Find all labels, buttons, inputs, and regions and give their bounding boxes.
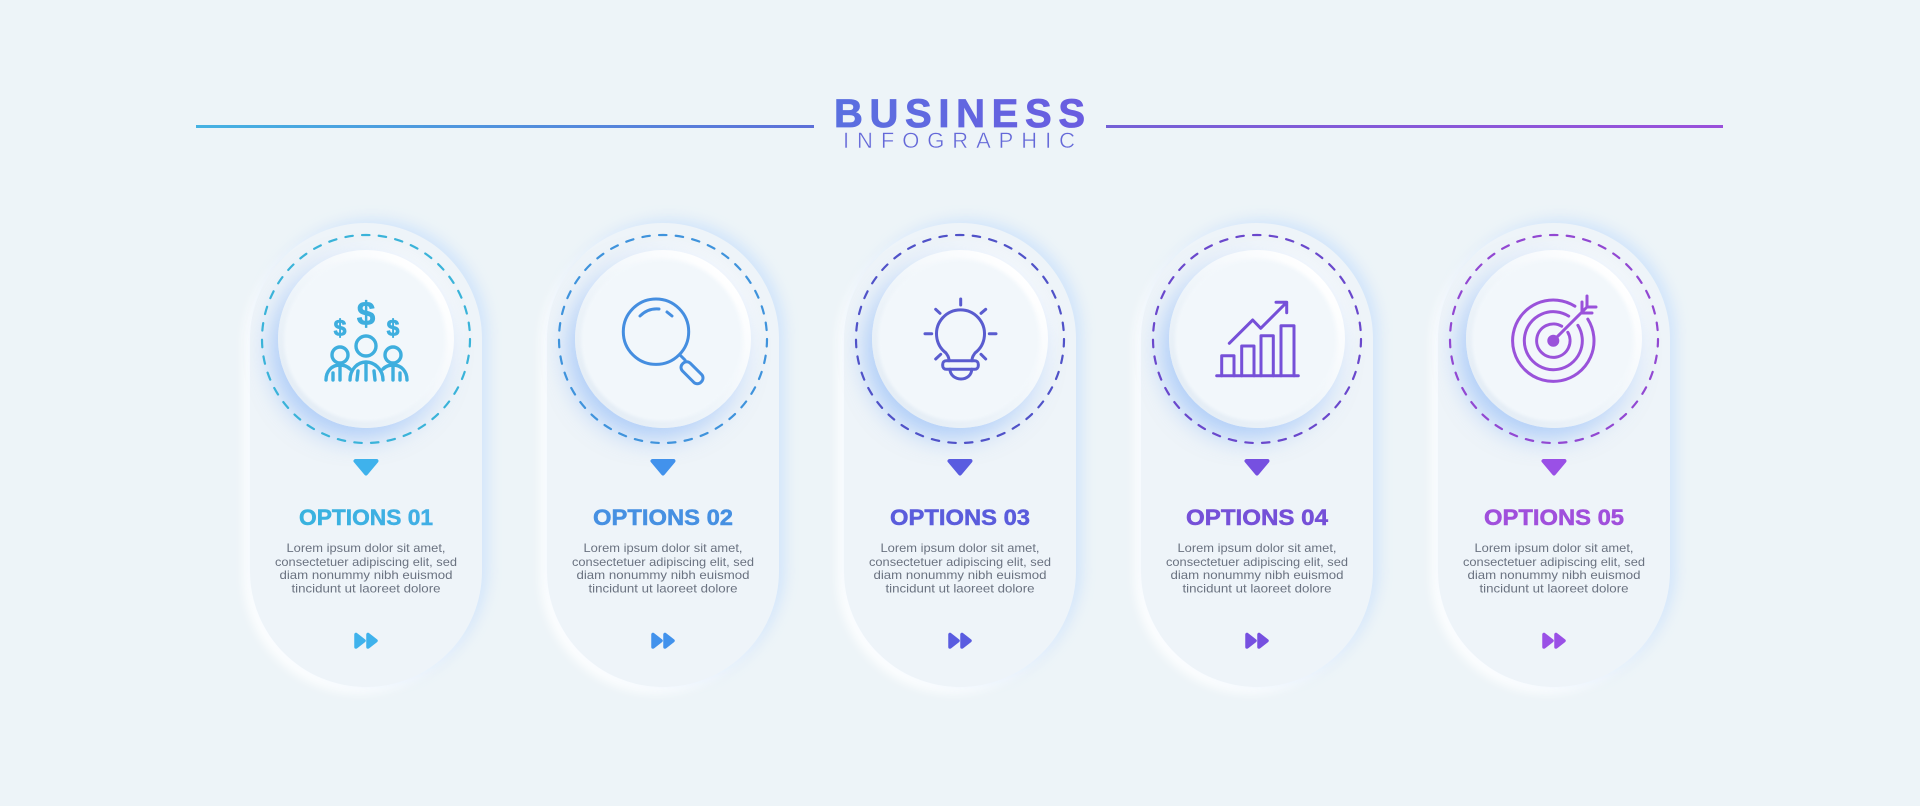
icon disc — [278, 250, 454, 428]
body text: consectetuer adipiscing elit, sed — [275, 555, 457, 569]
body text: consectetuer adipiscing elit, sed — [869, 555, 1051, 569]
body text: diam nonummy nibh euismod — [1468, 568, 1640, 582]
disc shadow — [1466, 250, 1642, 428]
body text: Lorem ipsum dolor sit amet, — [880, 541, 1039, 555]
body text: Lorem ipsum dolor sit amet, — [1178, 541, 1336, 555]
body text: diam nonummy nibh euismod — [874, 568, 1046, 582]
body text: diam nonummy nibh euismod — [576, 568, 750, 582]
down marker — [356, 461, 376, 474]
body text: tincidunt ut laoreet dolore — [1480, 582, 1629, 596]
icon: light bulb — [925, 299, 996, 379]
disc shadow — [575, 250, 751, 428]
header line right — [1106, 124, 1723, 128]
icon: target and arrow — [1513, 296, 1596, 381]
icon: team and dollars: $ — [387, 315, 400, 341]
disc shadow — [872, 250, 1048, 428]
icon: growth chart — [1217, 302, 1298, 376]
dashed ring — [559, 235, 767, 443]
body text: consectetuer adipiscing elit, sed — [572, 555, 754, 569]
icon disc — [575, 250, 751, 428]
body text — [1463, 541, 1645, 596]
icon: magnifier — [623, 299, 705, 386]
body text — [275, 541, 457, 596]
disc shadow — [1169, 250, 1345, 428]
body text: tincidunt ut laoreet dolore — [886, 582, 1035, 596]
forward icon — [356, 634, 376, 647]
body text — [869, 541, 1051, 596]
icon: team and dollars — [326, 295, 407, 380]
icon disc — [1169, 250, 1345, 428]
panel: options 04 — [1141, 223, 1373, 687]
heading: OPTIONS 02 — [593, 505, 733, 530]
heading: OPTIONS 04 — [1186, 505, 1329, 530]
dashed ring — [1450, 235, 1658, 443]
dashed ring — [856, 235, 1064, 443]
panel: options 03 — [844, 223, 1076, 687]
down marker — [950, 461, 970, 474]
dashed ring — [1153, 235, 1361, 443]
body text: consectetuer adipiscing elit, sed — [1166, 555, 1348, 569]
forward icon — [1544, 634, 1564, 647]
icon: team and dollars: $ — [334, 315, 347, 341]
forward icon — [950, 634, 970, 647]
body text: tincidunt ut laoreet dolore — [292, 582, 441, 596]
header line left — [196, 124, 814, 128]
body text: tincidunt ut laoreet dolore — [1182, 582, 1332, 596]
body text: tincidunt ut laoreet dolore — [588, 582, 738, 596]
dashed ring — [262, 235, 470, 443]
body text — [1166, 541, 1348, 596]
panel: options 02 — [547, 223, 779, 687]
icon disc — [872, 250, 1048, 428]
panel: options 05 — [1438, 223, 1670, 687]
body text: Lorem ipsum dolor sit amet, — [1474, 541, 1633, 555]
body text: Lorem ipsum dolor sit amet, — [286, 541, 445, 555]
title: BUSINESS — [834, 92, 1085, 136]
heading: OPTIONS 01 — [299, 505, 433, 530]
body text: Lorem ipsum dolor sit amet, — [584, 541, 742, 555]
title: INFOGRAPHIC — [843, 128, 1075, 153]
down marker — [1246, 461, 1268, 474]
body text — [572, 541, 754, 596]
forward icon — [1247, 634, 1267, 647]
body text: diam nonummy nibh euismod — [280, 568, 452, 582]
icon disc — [1466, 250, 1642, 428]
heading: OPTIONS 05 — [1484, 505, 1624, 530]
panel: options 01 — [250, 223, 482, 687]
heading: OPTIONS 03 — [890, 505, 1030, 530]
body text: diam nonummy nibh euismod — [1170, 568, 1344, 582]
down marker — [652, 461, 674, 474]
icon: team and dollars: $ — [357, 295, 375, 332]
disc shadow — [278, 250, 454, 428]
forward icon — [653, 634, 673, 647]
body text: consectetuer adipiscing elit, sed — [1463, 555, 1645, 569]
down marker — [1544, 461, 1564, 474]
